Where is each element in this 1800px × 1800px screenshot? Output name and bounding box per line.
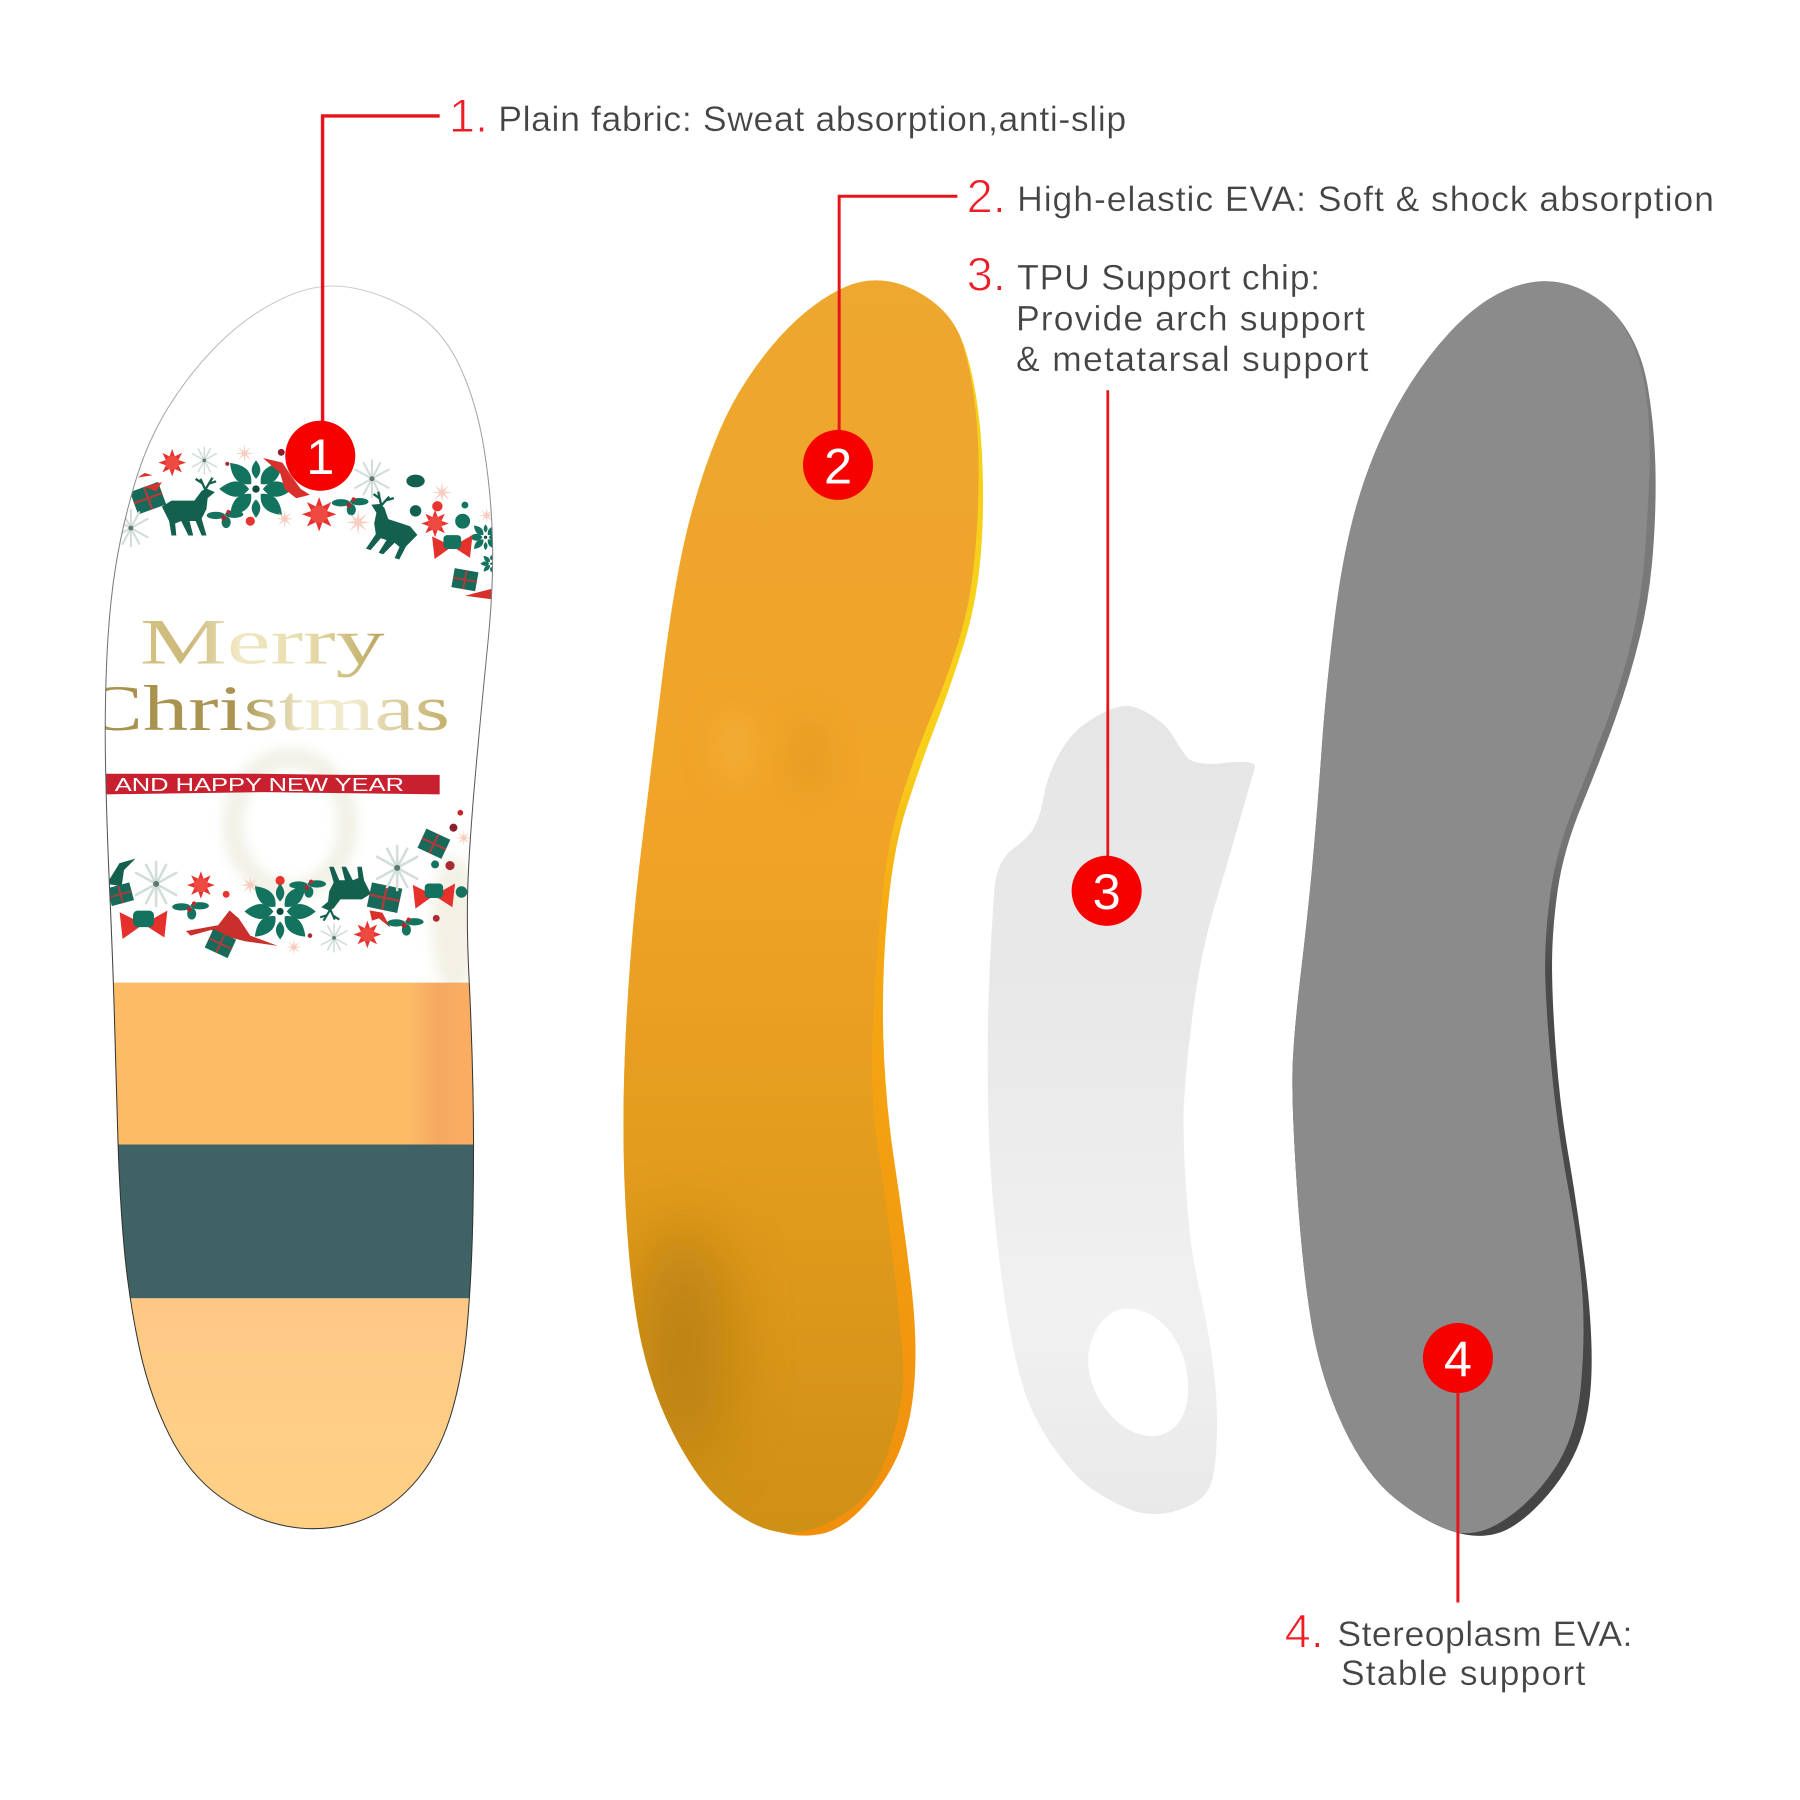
callout 2: high-elastic EVA: 2. xyxy=(967,169,1006,222)
callout 1: plain fabric: 1. xyxy=(449,89,488,142)
lower floral wreath xyxy=(107,810,472,958)
marker 1 xyxy=(285,421,355,491)
leader line 1 xyxy=(323,116,440,425)
marker 2: 2 xyxy=(824,437,852,494)
marker 3 xyxy=(1072,856,1142,926)
insole 1: plain fabric top layer with Christmas print xyxy=(83,286,502,1539)
upper floral wreath xyxy=(114,444,502,599)
leader line 2 xyxy=(839,196,957,436)
rim of orange layer xyxy=(623,280,983,1536)
greeting: Christmas: Christmas xyxy=(83,673,450,744)
marker 4: 4 xyxy=(1444,1330,1472,1387)
callout 1: plain fabric xyxy=(449,89,1126,142)
band: teal xyxy=(98,1145,488,1298)
callout 4: stereoplasm EVA: Stereoplasm EVA: xyxy=(1337,1614,1632,1654)
red ribbon with greeting xyxy=(104,774,440,795)
insole 2: high-elastic EVA orange layer xyxy=(623,280,983,1536)
cream fade near the band xyxy=(428,854,468,982)
orange face xyxy=(623,280,979,1533)
grey face xyxy=(1292,281,1650,1533)
leader line 4 xyxy=(1457,1383,1459,1603)
dark rim of grey layer xyxy=(1292,281,1656,1536)
infographic canvas xyxy=(104,100,1712,1692)
callout 2: high-elastic EVA: High-elastic EVA: Soft & shock absorption xyxy=(1017,179,1714,219)
callout 3: TPU support chip: Provide arch support xyxy=(1016,299,1365,339)
insole 3: TPU support chip xyxy=(988,706,1255,1514)
callout 4: stereoplasm EVA: Stable support xyxy=(1341,1653,1585,1693)
band: orange xyxy=(98,983,488,1146)
marker 3: 3 xyxy=(1093,863,1121,920)
marker 2 xyxy=(803,430,873,500)
printed pattern clipped to insole xyxy=(83,444,502,1539)
callout 3: TPU support chip: TPU Support chip: xyxy=(1017,257,1320,297)
greeting: Merry: Merry xyxy=(140,607,385,678)
leader line 3 xyxy=(1107,390,1109,861)
callout 1: plain fabric: Plain fabric: Sweat absorption,anti-slip xyxy=(498,99,1126,139)
band: peach xyxy=(130,1298,469,1528)
insole 4: stereoplasm EVA grey layer xyxy=(1292,281,1656,1536)
callout 3: TPU support chip: & metatarsal support xyxy=(1016,339,1368,379)
callout 4: stereoplasm EVA xyxy=(1285,1604,1632,1693)
callout 3: TPU support chip xyxy=(967,247,1368,379)
red ribbon with greeting: AND HAPPY NEW YEAR xyxy=(115,774,404,795)
marker 4 xyxy=(1423,1323,1493,1393)
callout 3: TPU support chip: 3. xyxy=(967,247,1006,300)
shading on orange face xyxy=(644,707,825,1464)
faint ring xyxy=(233,758,348,891)
callout 4: stereoplasm EVA: 4. xyxy=(1285,1604,1324,1657)
marker 1: 1 xyxy=(306,428,334,485)
